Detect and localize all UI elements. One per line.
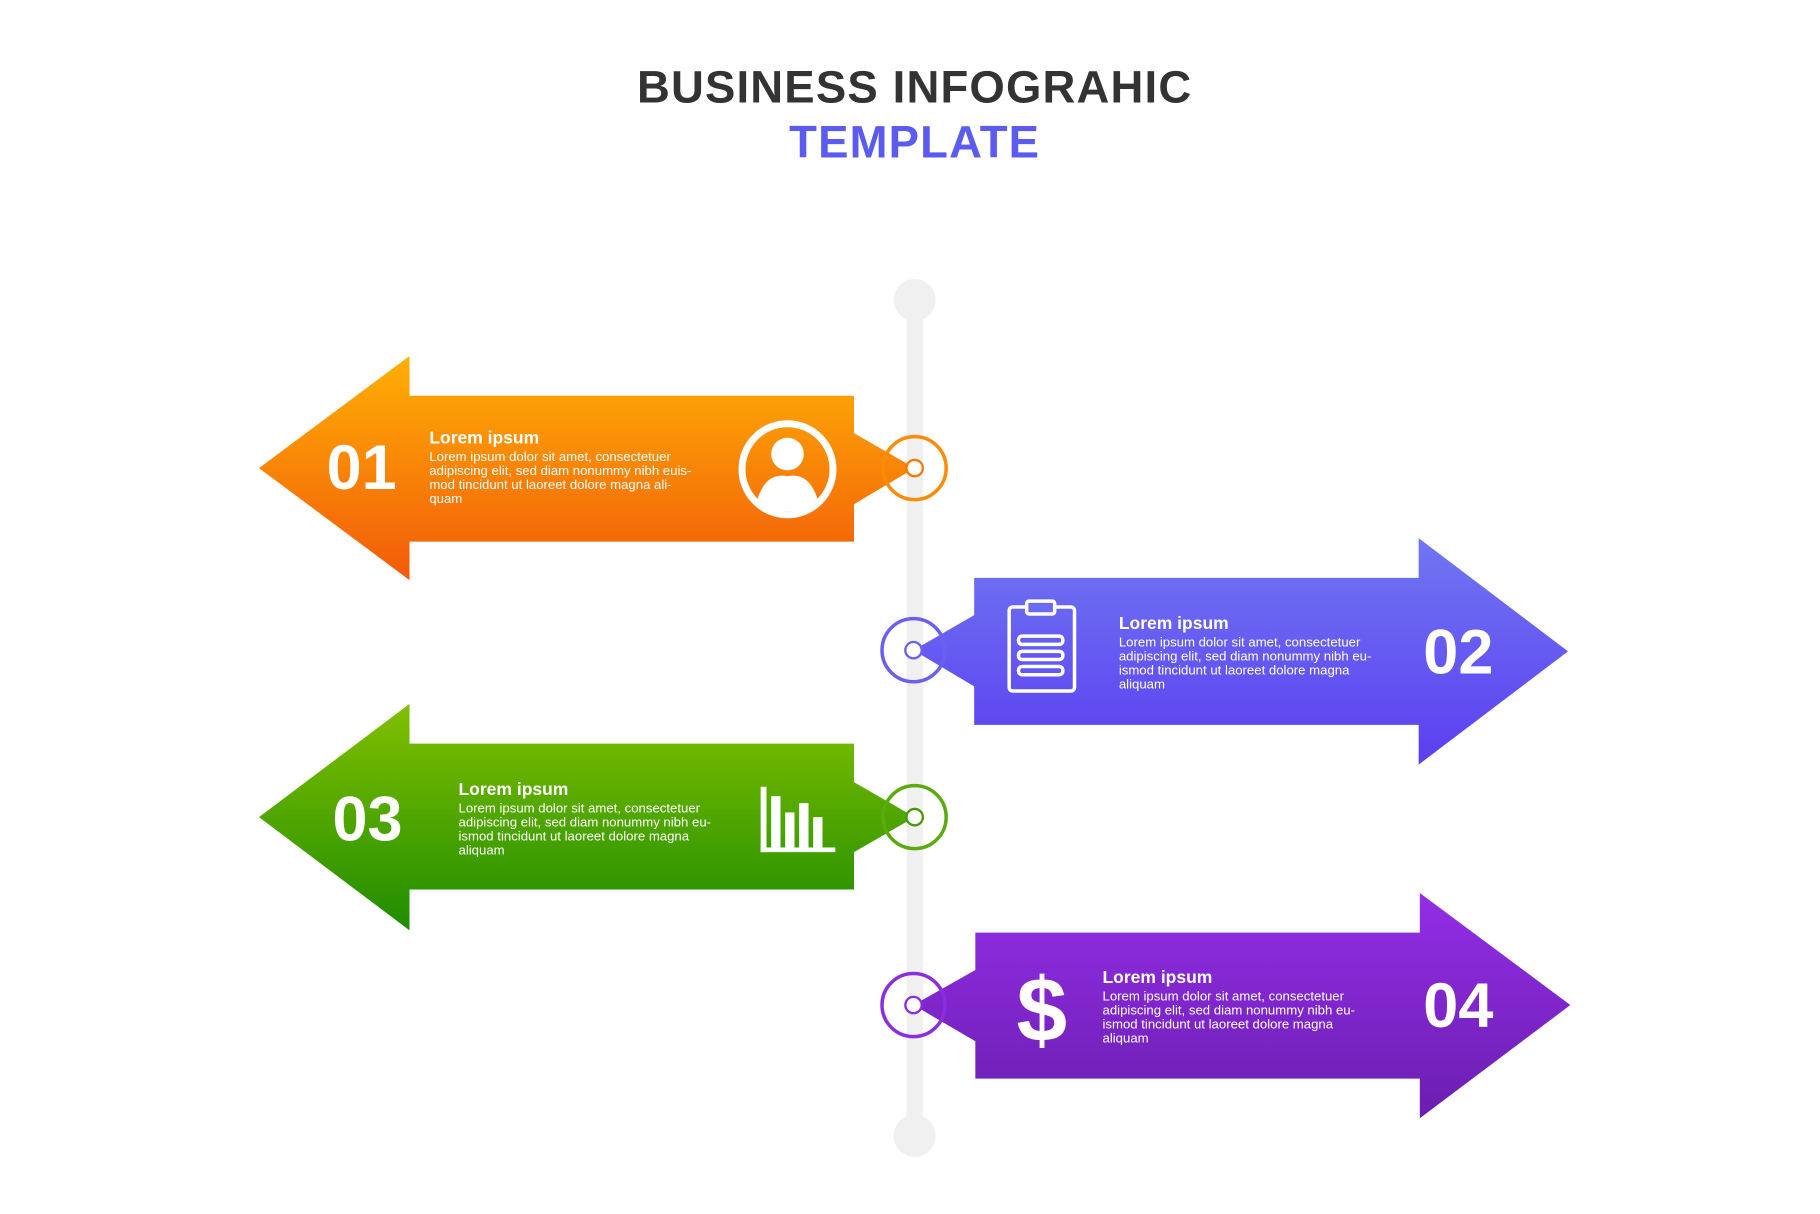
step 01: adipiscing elit, sed diam nonummy nibh euis- [429, 463, 691, 478]
step 02 [882, 538, 1568, 765]
icon: user [742, 424, 833, 515]
step 03: 03 [332, 784, 403, 854]
icon: bar chart [761, 787, 835, 852]
step 04: 04 [1423, 971, 1493, 1041]
step 03: Lorem ipsum [459, 779, 568, 799]
step 03: aliquam [459, 842, 505, 857]
step 03: Lorem ipsum dolor sit amet, consectetuer [459, 800, 701, 815]
icon: dollar: $ [1017, 960, 1067, 1061]
step 01: mod tincidunt ut laoreet dolore magna ali- [429, 477, 672, 492]
step 04 [882, 893, 1570, 1118]
step 03: ismod tincidunt ut laoreet dolore magna [459, 828, 690, 843]
step 04: Lorem ipsum dolor sit amet, consectetuer [1102, 988, 1345, 1003]
step 04: adipiscing elit, sed diam nonummy nibh eu- [1102, 1002, 1355, 1017]
title [637, 62, 1192, 168]
title: TEMPLATE [789, 117, 1040, 168]
step 02: adipiscing elit, sed diam nonummy nibh eu- [1119, 649, 1371, 664]
timeline [894, 279, 936, 1157]
step 02: Lorem ipsum dolor sit amet, consectetuer [1119, 635, 1361, 650]
step 02: ismod tincidunt ut laoreet dolore magna [1119, 663, 1350, 678]
step 03: adipiscing elit, sed diam nonummy nibh eu- [459, 814, 711, 829]
step 04: ismod tincidunt ut laoreet dolore magna [1102, 1016, 1334, 1031]
step 04: Lorem ipsum [1102, 967, 1212, 987]
step 02: aliquam [1119, 677, 1165, 692]
step 01: 01 [327, 433, 397, 503]
step 02: Lorem ipsum [1119, 613, 1229, 633]
title: BUSINESS INFOGRAHIC [637, 62, 1192, 113]
step 01: Lorem ipsum dolor sit amet, consectetuer [429, 449, 671, 464]
icon: clipboard [1009, 601, 1074, 691]
step 03 [259, 704, 946, 930]
step 04: aliquam [1102, 1030, 1149, 1045]
step 01: Lorem ipsum [429, 428, 539, 448]
step 01 [259, 356, 946, 580]
step 01: quam [429, 491, 462, 506]
step 02: 02 [1423, 618, 1493, 688]
